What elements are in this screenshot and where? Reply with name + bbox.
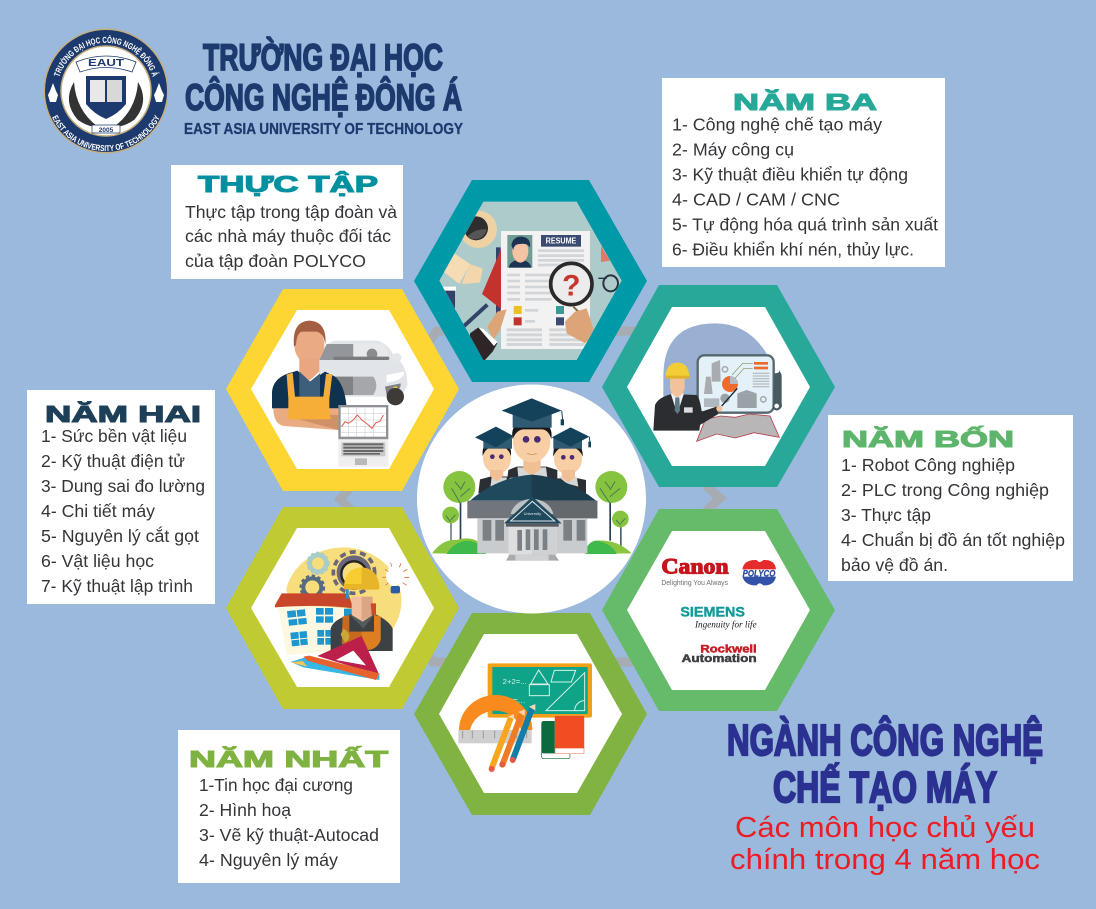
panel: thực tập: Thực tập trong tập đoàn và <box>185 202 397 222</box>
logo: Rockwell Automation <box>682 643 757 665</box>
hexagon: internship resume: ? <box>562 269 580 302</box>
hexagon: engineer with gears <box>226 507 459 709</box>
center circle: graduates and university <box>417 384 646 614</box>
panel: năm hai: 5- Nguyên lý cắt gọt <box>41 525 199 546</box>
panel: năm nhất: 3- Vẽ kỹ thuật-Autocad <box>199 825 379 845</box>
subheading: description: chính trong 4 năm học <box>730 844 1040 876</box>
panel: năm ba: 2- Máy công cụ <box>672 140 794 160</box>
subheading: description: Các môn học chủ yếu <box>735 812 1035 844</box>
panel: năm bốn: NĂM BỐN <box>842 425 1014 452</box>
heading: major name: CHẾ TẠO MÁY <box>773 762 997 812</box>
hexagon: internship resume: RESUME <box>546 237 577 246</box>
panel: năm ba: NĂM BA <box>733 88 877 115</box>
panel: năm nhất: NĂM NHẤT <box>189 745 388 772</box>
panel: thực tập <box>171 165 403 279</box>
panel: năm ba: 1- Công nghệ chế tạo máy <box>672 114 882 134</box>
title: university name: EAST ASIA UNIVERSITY OF TECHNOLOGY <box>184 121 464 138</box>
panel: năm hai: 2- Kỹ thuật điện tử <box>41 451 185 471</box>
logo: Siemens: SIEMENS <box>680 604 745 620</box>
logo: Siemens: Ingenuity for life <box>694 619 757 629</box>
hexagon: blackboard and tools <box>414 613 647 815</box>
panel: năm hai: 3- Dung sai đo lường <box>41 476 205 496</box>
logo: Siemens <box>680 604 757 629</box>
hexagon: internship resume <box>414 180 647 382</box>
panel: năm hai: 6- Vật liệu học <box>41 551 154 571</box>
building: University <box>524 511 541 516</box>
title: university name: CÔNG NGHỆ ĐÔNG Á <box>185 76 462 118</box>
panel: thực tập: các nhà máy thuộc đối tác <box>185 226 391 246</box>
panel: năm nhất: 2- Hình hoạ <box>199 800 291 820</box>
hexagon: mechanic with car <box>226 289 459 491</box>
logo: Canon: Canon <box>661 553 729 578</box>
trees <box>432 471 632 554</box>
logo: Canon <box>661 553 729 587</box>
logo: EAUT seal: 2005 <box>99 127 114 134</box>
panel: năm ba: 6- Điều khiển khí nén, thủy lực. <box>672 240 914 260</box>
panel: năm nhất: 4- Nguyên lý máy <box>199 850 338 870</box>
panel: năm bốn: 2- PLC trong Công nghiệp <box>841 480 1049 500</box>
logo: EAUT seal: TRƯỜNG ĐẠI HỌC CÔNG NGHỆ ĐÔNG Á <box>54 35 160 77</box>
panel: thực tập: của tập đoàn POLYCO <box>185 251 366 271</box>
title: university name: TRƯỜNG ĐẠI HỌC <box>203 36 443 78</box>
panel: năm ba <box>662 78 945 267</box>
panel: năm hai: 7- Kỹ thuật lập trình <box>41 576 193 596</box>
connectors between hexagons <box>340 331 720 662</box>
panel: năm bốn <box>828 415 1073 581</box>
hexagon: blackboard and tools: 2+2=... <box>503 677 527 686</box>
logo: Polyco: POLYCO <box>743 568 775 578</box>
logo: Canon: Delighting You Always <box>661 580 728 587</box>
panel: thực tập: THỰC TẬP <box>198 170 378 197</box>
panel: năm hai: 4- Chi tiết máy <box>41 501 155 521</box>
subheading: description <box>730 812 1040 876</box>
panel: năm ba: 5- Tự động hóa quá trình sản xuất <box>672 214 938 234</box>
panel: năm ba: 4- CAD / CAM / CNC <box>672 190 840 210</box>
panel: năm hai: NĂM HAI <box>45 400 201 427</box>
panel: năm nhất: 1-Tin học đại cương <box>199 775 353 795</box>
hexagon: engineer with presentation <box>602 285 835 487</box>
panel: năm hai: 1- Sức bền vật liệu <box>41 426 187 446</box>
logo: Rockwell Automation: Rockwell <box>700 643 757 655</box>
students <box>475 398 591 493</box>
panel: năm nhất <box>178 730 400 883</box>
panel: năm bốn: 3- Thực tập <box>841 505 931 525</box>
logo: EAUT seal <box>44 28 168 154</box>
panel: năm bốn: 1- Robot Công nghiệp <box>841 455 1015 475</box>
title: university name <box>184 36 464 138</box>
panel: năm bốn: bảo vệ đồ án. <box>841 555 948 575</box>
logo: EAUT seal: EAST ASIA UNIVERSITY OF TECHNOLOGY <box>52 114 160 152</box>
hexagon: partners logos <box>602 509 835 711</box>
heading: major name <box>727 714 1043 812</box>
logo: Rockwell Automation: Automation <box>682 653 757 665</box>
panel: năm bốn: 4- Chuẩn bị đồ án tốt nghiệp <box>841 530 1065 550</box>
building <box>467 475 597 561</box>
logo: EAUT seal: EAUT <box>88 57 125 69</box>
panel: năm hai <box>27 390 215 604</box>
panel: năm ba: 3- Kỹ thuật điều khiển tự động <box>672 164 908 184</box>
hexagon: blackboard and tools: 4+=... <box>503 696 525 705</box>
